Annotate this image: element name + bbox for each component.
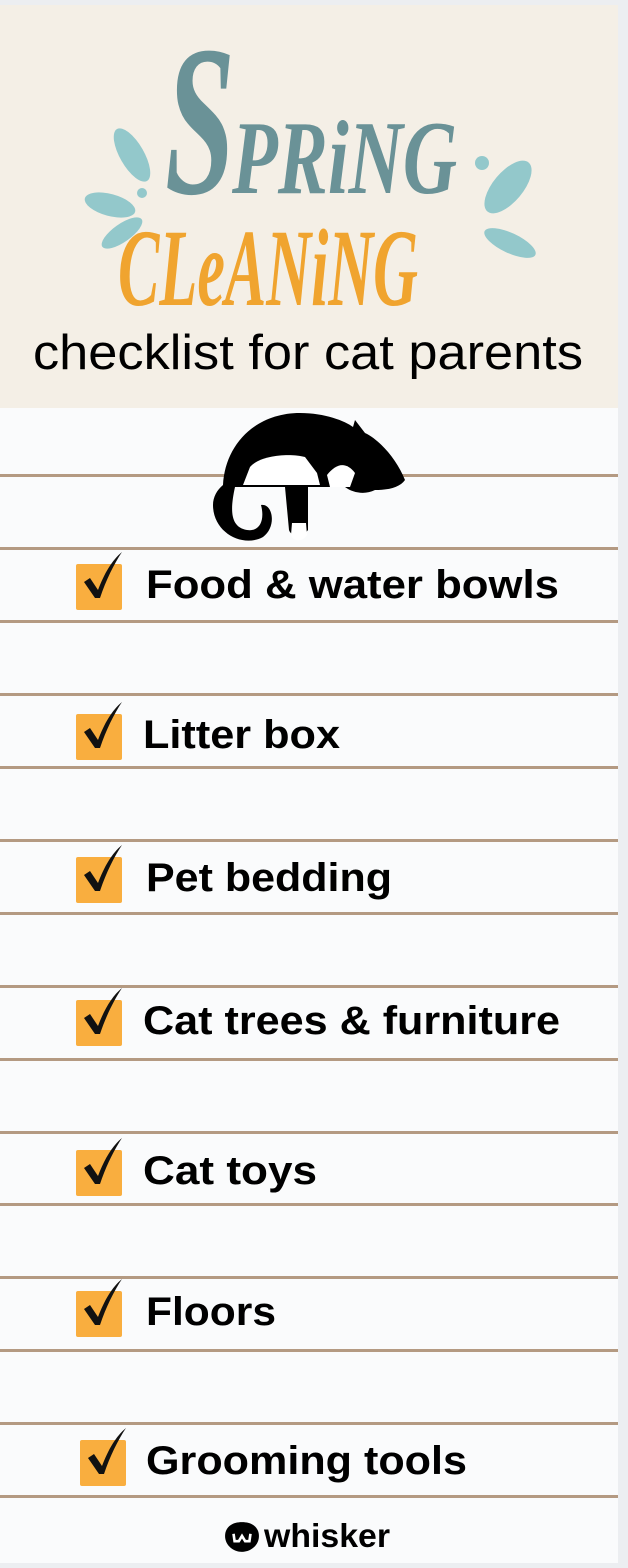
item: floors: Floors [146, 1290, 276, 1334]
subtitle: checklist for cat parents [33, 326, 583, 380]
title lettering [84, 5, 536, 315]
item: litter box [76, 702, 340, 760]
item: pet bedding: Pet bedding [146, 856, 392, 900]
logo: whisker: whisker [264, 1518, 390, 1554]
item: food & water bowls: Food & water bowls [146, 563, 559, 607]
item: cat toys: Cat toys [143, 1149, 317, 1193]
checkbox [76, 564, 122, 610]
title lettering: PRiNG [231, 99, 457, 216]
item: floors [76, 1279, 276, 1337]
item: pet bedding [76, 845, 392, 903]
icon: sleeping cat [213, 413, 405, 541]
item: litter box: Litter box [143, 713, 340, 757]
header panel [0, 5, 618, 408]
item: cat toys [76, 1138, 317, 1196]
splash drops [82, 123, 540, 264]
item: grooming tools: Grooming tools [146, 1439, 467, 1483]
item: cat trees & furniture: Cat trees & furniture [143, 999, 560, 1043]
title lettering: S [165, 5, 235, 240]
item: food & water bowls [76, 552, 559, 610]
item: grooming tools [80, 1428, 467, 1486]
item: cat trees & furniture [76, 988, 560, 1046]
